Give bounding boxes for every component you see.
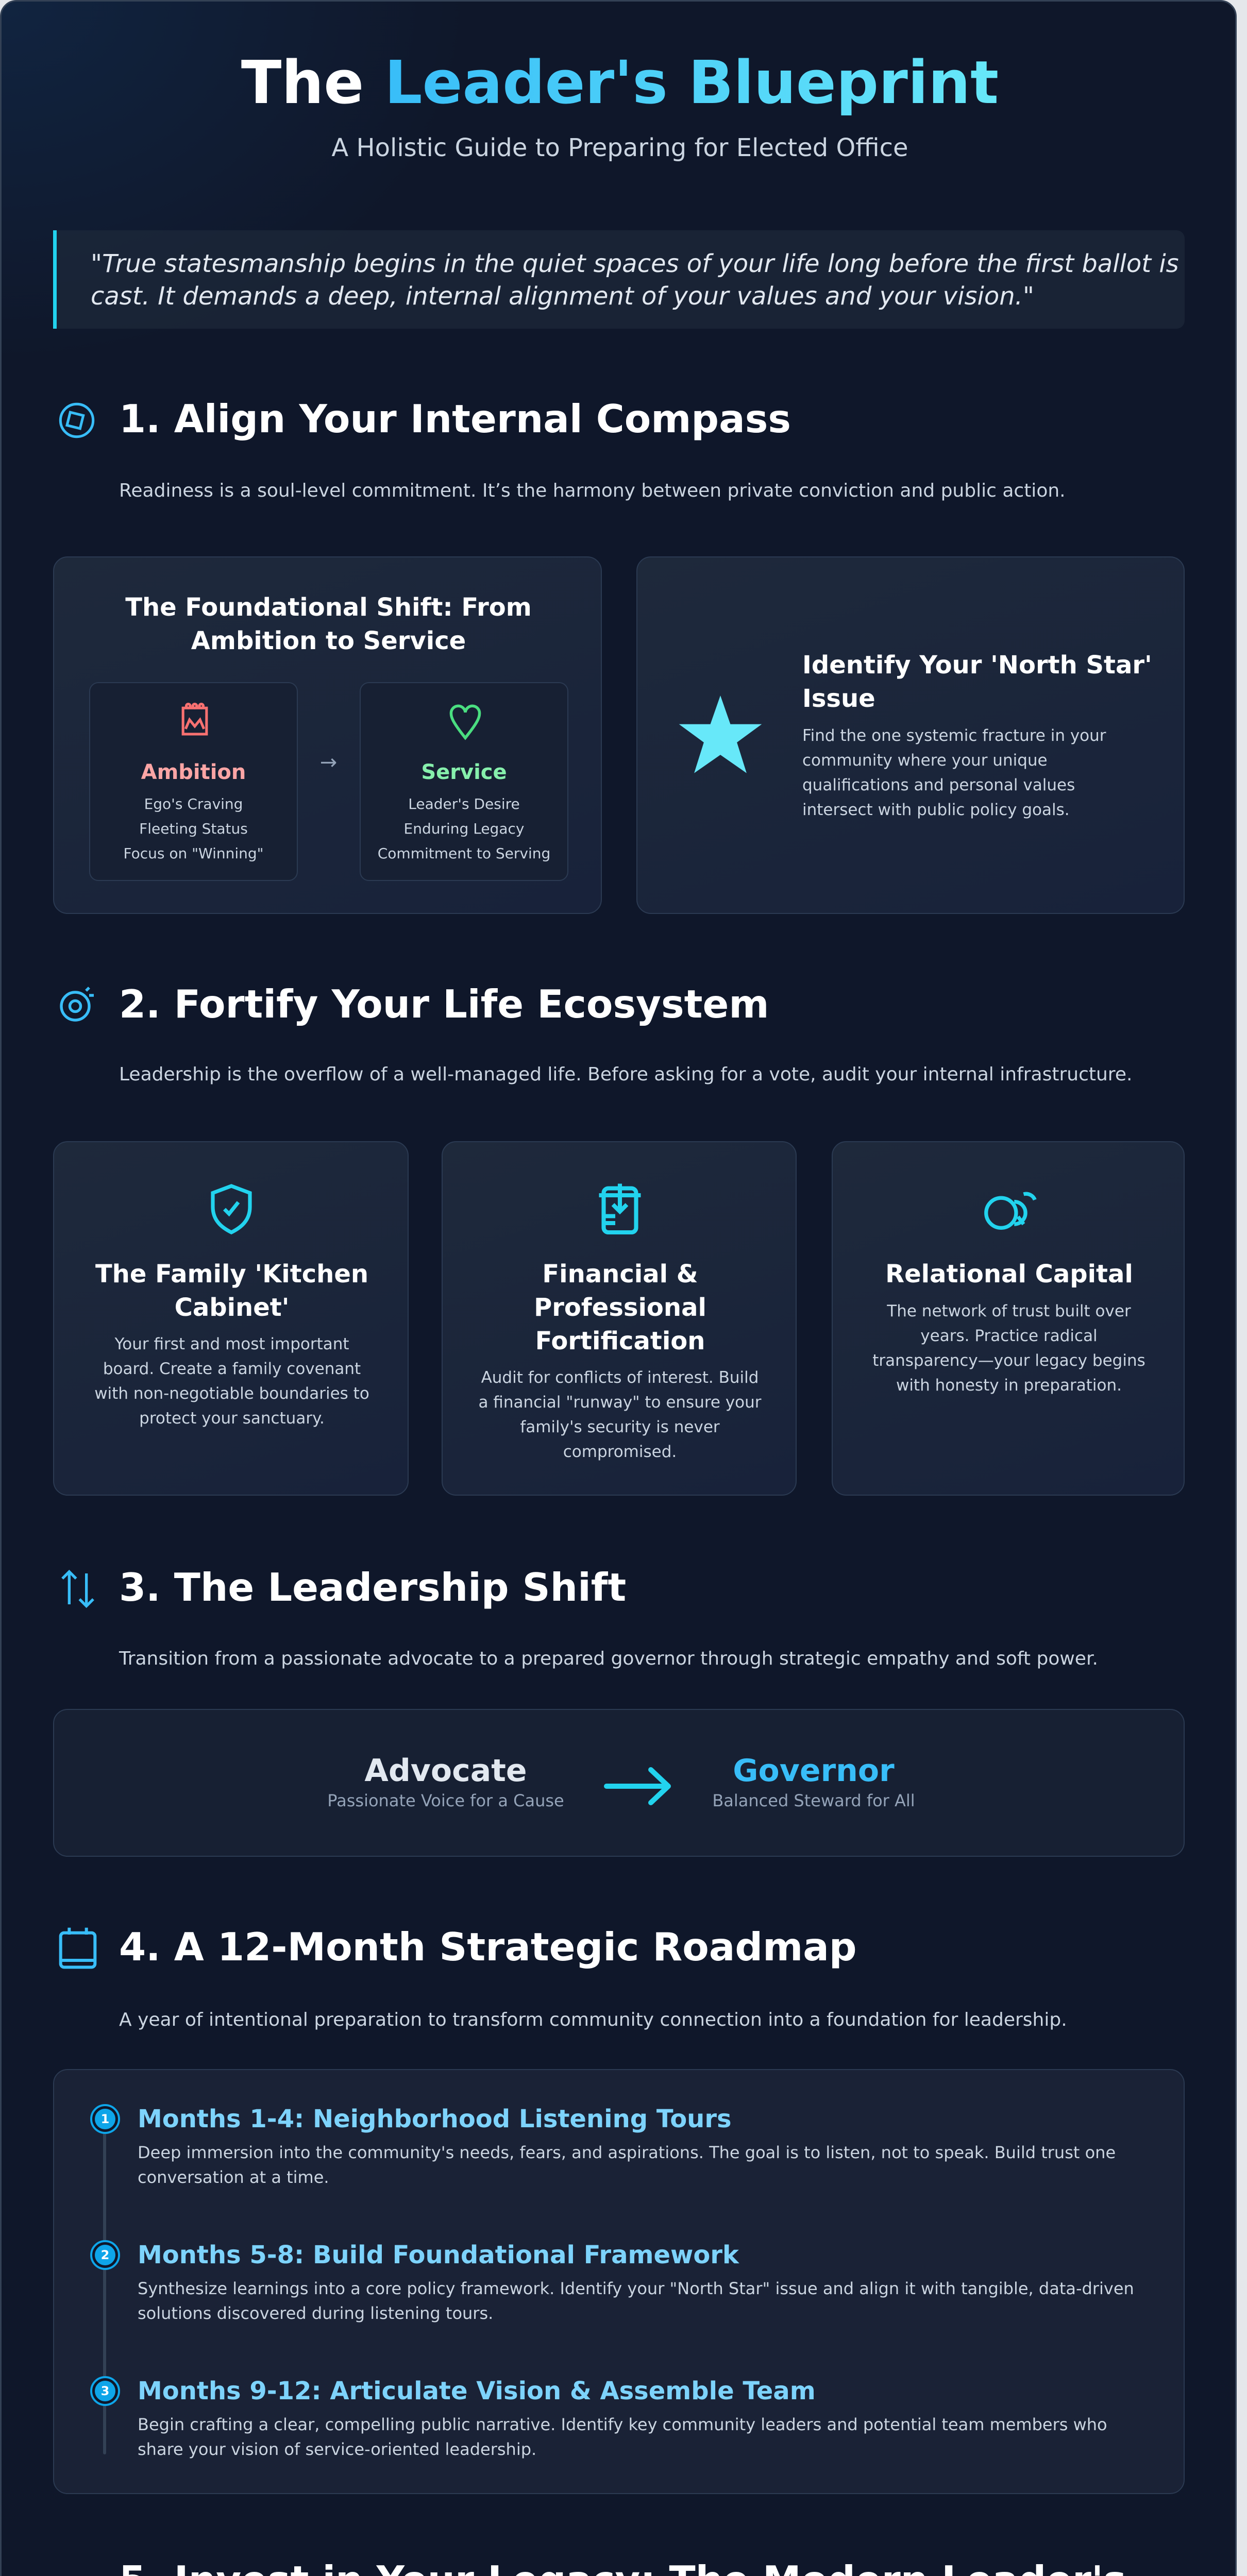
section 1 description: Readiness is a soul-level commitment. It’s the harmony between private conviction and public action.	[119, 480, 1066, 501]
step 3	[90, 2376, 1107, 2459]
step 3: 3	[101, 2384, 109, 2398]
sub-panel: service: Leader's Desire	[408, 795, 520, 812]
governor: Balanced Steward for All	[712, 1791, 915, 1810]
title: Identify Your 'North Star' Issue	[802, 651, 1152, 713]
sub-panel: service: Service	[421, 760, 507, 784]
step 2: Synthesize learnings into a core policy framework. Identify your "North Star" issue and align it with tangible, data-driven solutions discovered during listening tours.	[138, 2279, 1134, 2323]
icon: document	[599, 1184, 641, 1234]
icon: up-down arrows	[61, 1569, 94, 1608]
timeline line	[103, 2120, 106, 2454]
sub-panel: service: Enduring Legacy	[404, 820, 524, 837]
quote callout	[53, 230, 1185, 329]
card: family kitchen cabinet: Your first and most important board. Create a family covenant with non-negotiable boundaries to protect your sanctuary.	[94, 1335, 369, 1428]
icon: people	[984, 1192, 1037, 1230]
icon: target	[60, 987, 94, 1022]
panel title	[125, 593, 532, 655]
title: The Leader's Blueprint	[241, 48, 999, 117]
sub-panel: ambition: Fleeting Status	[139, 820, 248, 837]
step 2: Months 5-8: Build Foundational Framework	[138, 2241, 739, 2269]
arrow	[604, 1767, 671, 1805]
step 1: Deep immersion into the community's needs, fears, and aspirations. The goal is to listen, not to speak. Build trust one conversation at a time.	[138, 2143, 1116, 2187]
panel: foundational shift	[53, 556, 602, 914]
subtitle: A Holistic Guide to Preparing for Elected Office	[331, 133, 908, 162]
panel: north star	[636, 556, 1185, 914]
advocate: Passionate Voice for a Cause	[327, 1791, 564, 1810]
panel title: Ambition to Service	[191, 626, 466, 655]
governor: Governor	[733, 1753, 895, 1789]
step 2: 2	[101, 2248, 109, 2262]
icon: heart	[449, 705, 481, 740]
step 3: Begin crafting a clear, compelling public narrative. Identify key community leaders and potential team members who share your vision of service-oriented leadership.	[138, 2415, 1107, 2459]
sub-panel: service: Commitment to Serving	[378, 845, 550, 862]
icon: shield	[211, 1184, 252, 1234]
panel: roadmap timeline	[53, 2069, 1185, 2494]
step 1: Months 1-4: Neighborhood Listening Tours	[138, 2105, 732, 2133]
card: financial fortification: Financial & Professional Fortification	[534, 1260, 706, 1355]
panel: advocate to governor	[53, 1709, 1185, 1857]
card: financial fortification: Audit for conflicts of interest. Build a financial "runway" to ensure your family's security is never compromised.	[478, 1368, 762, 1461]
section 4 heading: 4. A 12-Month Strategic Roadmap	[119, 1924, 857, 1970]
quote callout: "True statesmanship begins in the quiet spaces of your life long before the first ballot is cast. It demands a deep, internal alignment of your values and your vision."	[91, 249, 1179, 311]
advocate	[327, 1753, 564, 1810]
icon: star	[679, 696, 762, 773]
card: family kitchen cabinet	[53, 1141, 409, 1496]
sub-panel: service	[360, 682, 568, 881]
sub-panel: ambition: Focus on "Winning"	[123, 845, 264, 862]
card: relational capital: The network of trust built over years. Practice radical transparency—your legacy begins with honesty in preparation.	[872, 1302, 1145, 1395]
section 2 heading: 2. Fortify Your Life Ecosystem	[119, 981, 769, 1027]
panel title: The Foundational Shift: From	[125, 593, 532, 622]
section 3 description: Transition from a passionate advocate to a prepared governor through strategic empathy and soft power.	[119, 1648, 1098, 1669]
card: relational capital	[832, 1141, 1185, 1496]
section 4 description: A year of intentional preparation to transform community connection into a foundation for leadership.	[119, 2009, 1067, 2030]
governor	[712, 1753, 915, 1810]
icon: compass	[59, 403, 95, 438]
sub-panel: ambition	[89, 682, 298, 881]
step 1	[90, 2104, 1116, 2187]
sub-panel: ambition: Ego's Craving	[144, 795, 243, 812]
advocate: Advocate	[364, 1753, 527, 1789]
card: relational capital: Relational Capital	[885, 1260, 1133, 1289]
section 1 heading: 1. Align Your Internal Compass	[119, 396, 791, 442]
card: financial fortification	[442, 1141, 797, 1496]
section 2 description: Leadership is the overflow of a well-managed life. Before asking for a vote, audit your internal infrastructure.	[119, 1064, 1132, 1085]
icon: calendar	[59, 1928, 97, 1969]
arrow: →	[320, 751, 337, 774]
card: family kitchen cabinet: The Family 'Kitchen Cabinet'	[95, 1260, 368, 1322]
icon: crown	[181, 703, 208, 736]
section 3 heading: 3. The Leadership Shift	[119, 1565, 626, 1610]
step 1: 1	[101, 2112, 109, 2126]
step 2	[90, 2240, 1134, 2323]
step 3: Months 9-12: Articulate Vision & Assemble Team	[138, 2377, 816, 2405]
sub-panel: ambition: Ambition	[141, 760, 246, 784]
description: Find the one systemic fracture in your community where your unique qualifications and personal values intersect with public policy goals.	[802, 726, 1106, 819]
